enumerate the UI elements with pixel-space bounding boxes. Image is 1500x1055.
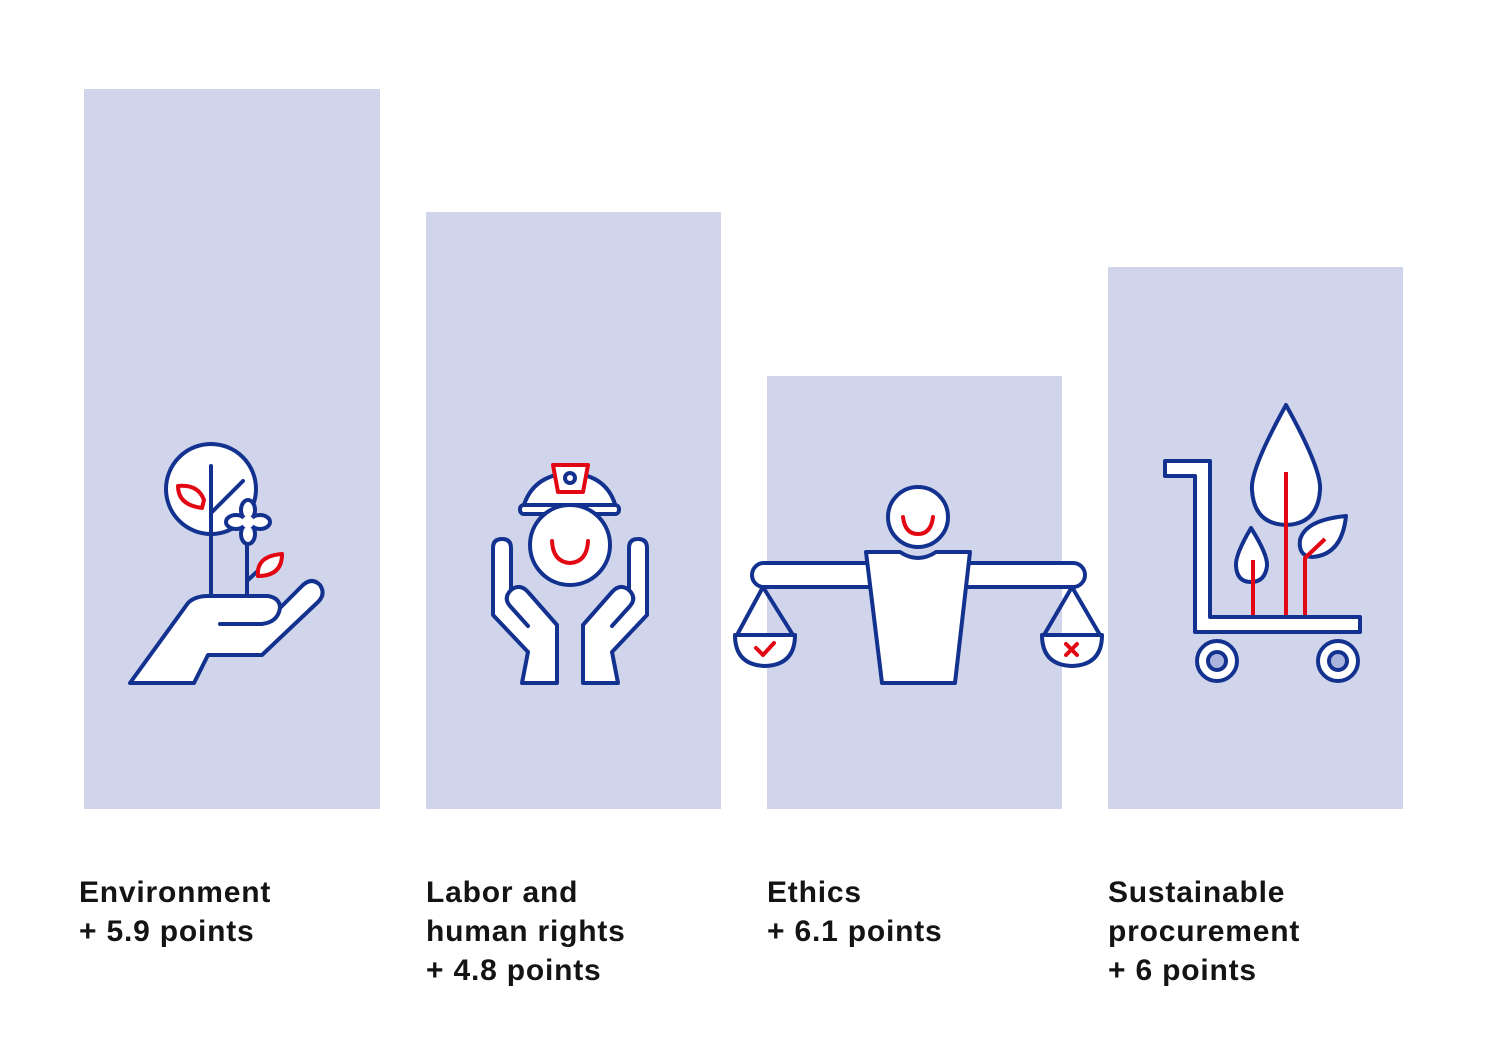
label: ethics <box>767 876 942 948</box>
label: labor and human rights: Labor and <box>426 876 578 909</box>
icon: cart with plants <box>1165 405 1360 681</box>
bar: environment <box>84 89 380 809</box>
label: ethics: + 6.1 points <box>767 915 942 948</box>
icon: hand holding plants <box>130 444 323 683</box>
label: sustainable procurement: procurement <box>1108 915 1300 948</box>
icon: worker in hands <box>493 465 647 683</box>
label: labor and human rights <box>426 876 626 987</box>
icon: person balancing scales <box>735 487 1102 683</box>
label: sustainable procurement: + 6 points <box>1108 954 1257 987</box>
label: labor and human rights: human rights <box>426 915 626 948</box>
label: ethics: Ethics <box>767 876 862 909</box>
label: sustainable procurement <box>1108 876 1300 987</box>
bar: sustainable procurement <box>1108 267 1403 809</box>
label: environment: + 5.9 points <box>79 915 254 948</box>
bar: ethics <box>767 376 1062 809</box>
label: environment <box>79 876 271 948</box>
label: labor and human rights: + 4.8 points <box>426 954 601 987</box>
bar: labor and human rights <box>426 212 721 809</box>
label: environment: Environment <box>79 876 271 909</box>
label: sustainable procurement: Sustainable <box>1108 876 1285 909</box>
